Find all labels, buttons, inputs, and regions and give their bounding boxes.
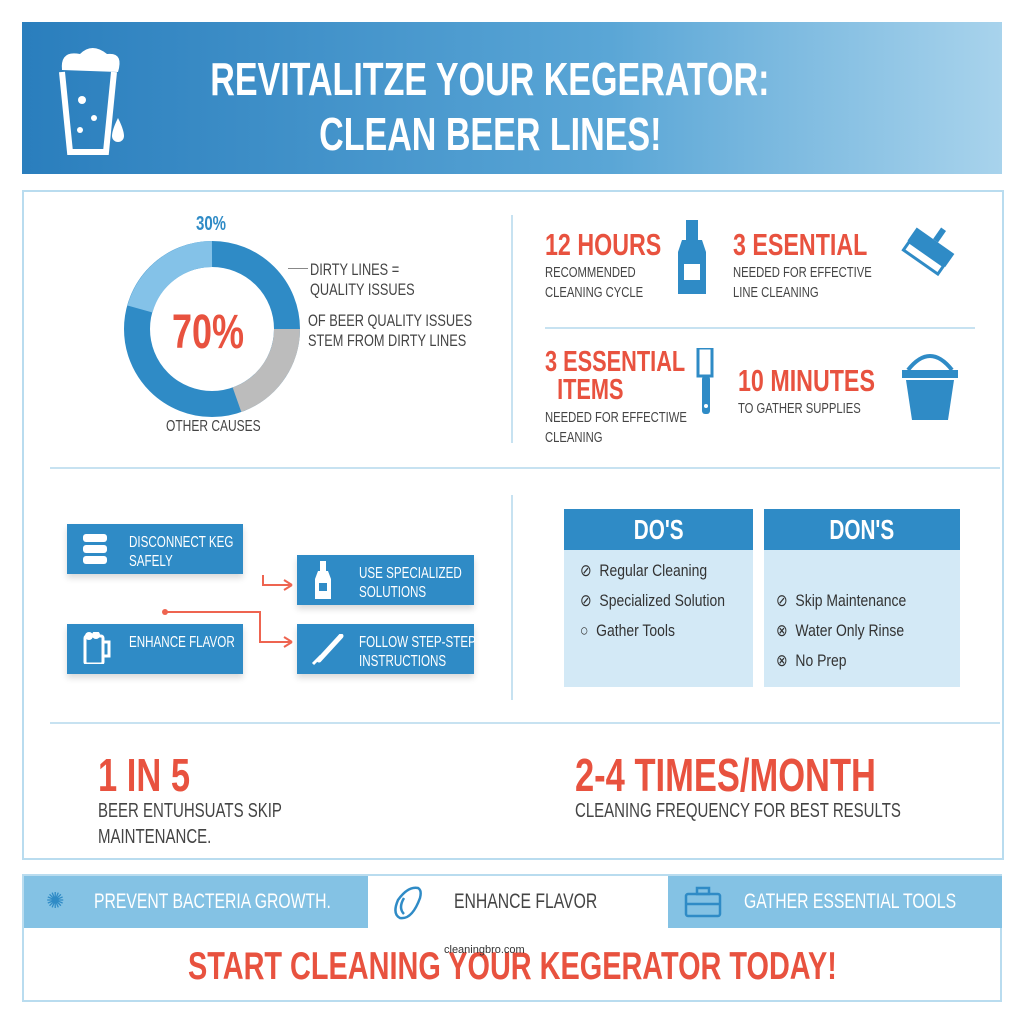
stat: 1 in 5: 1 IN 5 xyxy=(98,749,190,801)
dos panel: ⊘ Specialized Solution xyxy=(580,591,725,610)
step: use specialized solutions xyxy=(297,555,474,605)
benefit: gather tools: GATHER ESSENTIAL TOOLS xyxy=(744,890,956,913)
call to action: START CLEANING YOUR KEGERATOR TODAY! xyxy=(188,945,836,988)
stats: 12 hours: RECOMMENDED xyxy=(545,264,636,281)
donts panel: DON'S xyxy=(830,514,894,545)
stat: 2-4 times/month: 2-4 TIMES/MONTH xyxy=(575,749,876,801)
arrows xyxy=(162,575,292,648)
donut chart: STEM FROM DIRTY LINES xyxy=(308,331,466,350)
stat: 1 in 5 xyxy=(98,749,282,848)
stats: 12 hours xyxy=(545,227,661,301)
stats: 12 hours: CLEANING CYCLE xyxy=(545,284,643,301)
flow steps xyxy=(64,524,476,680)
footer benefits bar xyxy=(22,874,1002,1002)
stat: 2-4 times/month: CLEANING FREQUENCY FOR BEST RESULTS xyxy=(575,800,901,822)
stat: 1 in 5: BEER ENTUHSUATS SKIP xyxy=(98,800,282,822)
footer benefits bar: cleaningbro.com xyxy=(444,944,525,956)
step: enhance flavor xyxy=(67,624,243,674)
donut chart: 70% xyxy=(172,306,244,359)
stats: 10 minutes: TO GATHER SUPPLIES xyxy=(738,400,861,417)
stats: 3 essential items xyxy=(545,346,687,446)
dos panel: ⊘ Regular Cleaning xyxy=(580,561,707,580)
icon: beer glass xyxy=(59,48,124,155)
benefit: prevent bacteria: PREVENT BACTERIA GROWTH. xyxy=(94,890,331,913)
step: use specialized solutions: SOLUTIONS xyxy=(359,584,426,601)
stats: 10 minutes xyxy=(738,363,875,417)
title: CLEAN BEER LINES! xyxy=(319,108,661,160)
stat: 1 in 5: MAINTENANCE. xyxy=(98,826,211,848)
stats: 3 essential items: ITEMS xyxy=(557,374,624,406)
donts panel: ⊗ Water Only Rinse xyxy=(776,621,904,640)
stats: 12 hours: 12 HOURS xyxy=(545,227,661,262)
donut chart: OTHER CAUSES xyxy=(166,418,261,435)
donut chart: 30% xyxy=(196,213,226,235)
donts panel: ⊗ No Prep xyxy=(776,651,847,670)
stats: 3 essential items: NEEDED FOR EFFECTIWE xyxy=(545,409,687,426)
header banner xyxy=(22,22,1002,174)
step: enhance flavor: ENHANCE FLAVOR xyxy=(129,634,235,651)
title xyxy=(210,53,770,160)
donut chart: QUALITY ISSUES xyxy=(310,280,415,299)
step: follow instructions: INSTRUCTIONS xyxy=(359,653,446,670)
stats: 3 essential items: CLEANING xyxy=(545,429,603,446)
title: REVITALITZE YOUR KEGERATOR: xyxy=(210,53,770,105)
step: follow instructions: FOLLOW STEP-STEP xyxy=(359,634,476,651)
stat: 2-4 times/month xyxy=(575,749,901,822)
step: follow instructions xyxy=(297,624,474,674)
stats: 3 esential xyxy=(733,227,872,301)
donts panel xyxy=(764,509,960,687)
stats: 3 esential: NEEDED FOR EFFECTIVE xyxy=(733,264,872,281)
benefit: prevent bacteria xyxy=(24,876,368,928)
icon: bucket xyxy=(902,354,958,420)
step: disconnect keg xyxy=(67,524,243,574)
step: use specialized solutions: USE SPECIALIZED xyxy=(359,565,462,582)
benefit: enhance flavor xyxy=(394,886,597,920)
dos panel: DO'S xyxy=(634,514,683,545)
icon: brush tool xyxy=(696,348,714,414)
donut chart: DIRTY LINES = xyxy=(310,260,399,279)
dos panel: ○ Gather Tools xyxy=(580,621,675,640)
step: disconnect keg: DISCONNECT KEG xyxy=(129,534,233,551)
donut chart: OF BEER QUALITY ISSUES xyxy=(308,311,472,330)
benefit: prevent bacteria: ✺ xyxy=(46,888,64,913)
donut chart xyxy=(124,213,472,435)
stats: 3 essential items: 3 ESSENTIAL xyxy=(545,346,685,378)
icon: brush xyxy=(901,228,954,276)
icon: bottle xyxy=(678,220,706,294)
stats: 10 minutes: 10 MINUTES xyxy=(738,363,875,398)
benefit: enhance flavor: ENHANCE FLAVOR xyxy=(454,890,597,913)
main panel xyxy=(22,190,1004,860)
dos panel xyxy=(564,509,753,687)
stats: 3 esential: LINE CLEANING xyxy=(733,284,819,301)
step: disconnect keg: SAFELY xyxy=(129,553,173,570)
donts panel: ⊘ Skip Maintenance xyxy=(776,591,906,610)
stats: 3 esential: 3 ESENTIAL xyxy=(733,227,867,262)
benefit: gather tools xyxy=(668,876,1002,928)
